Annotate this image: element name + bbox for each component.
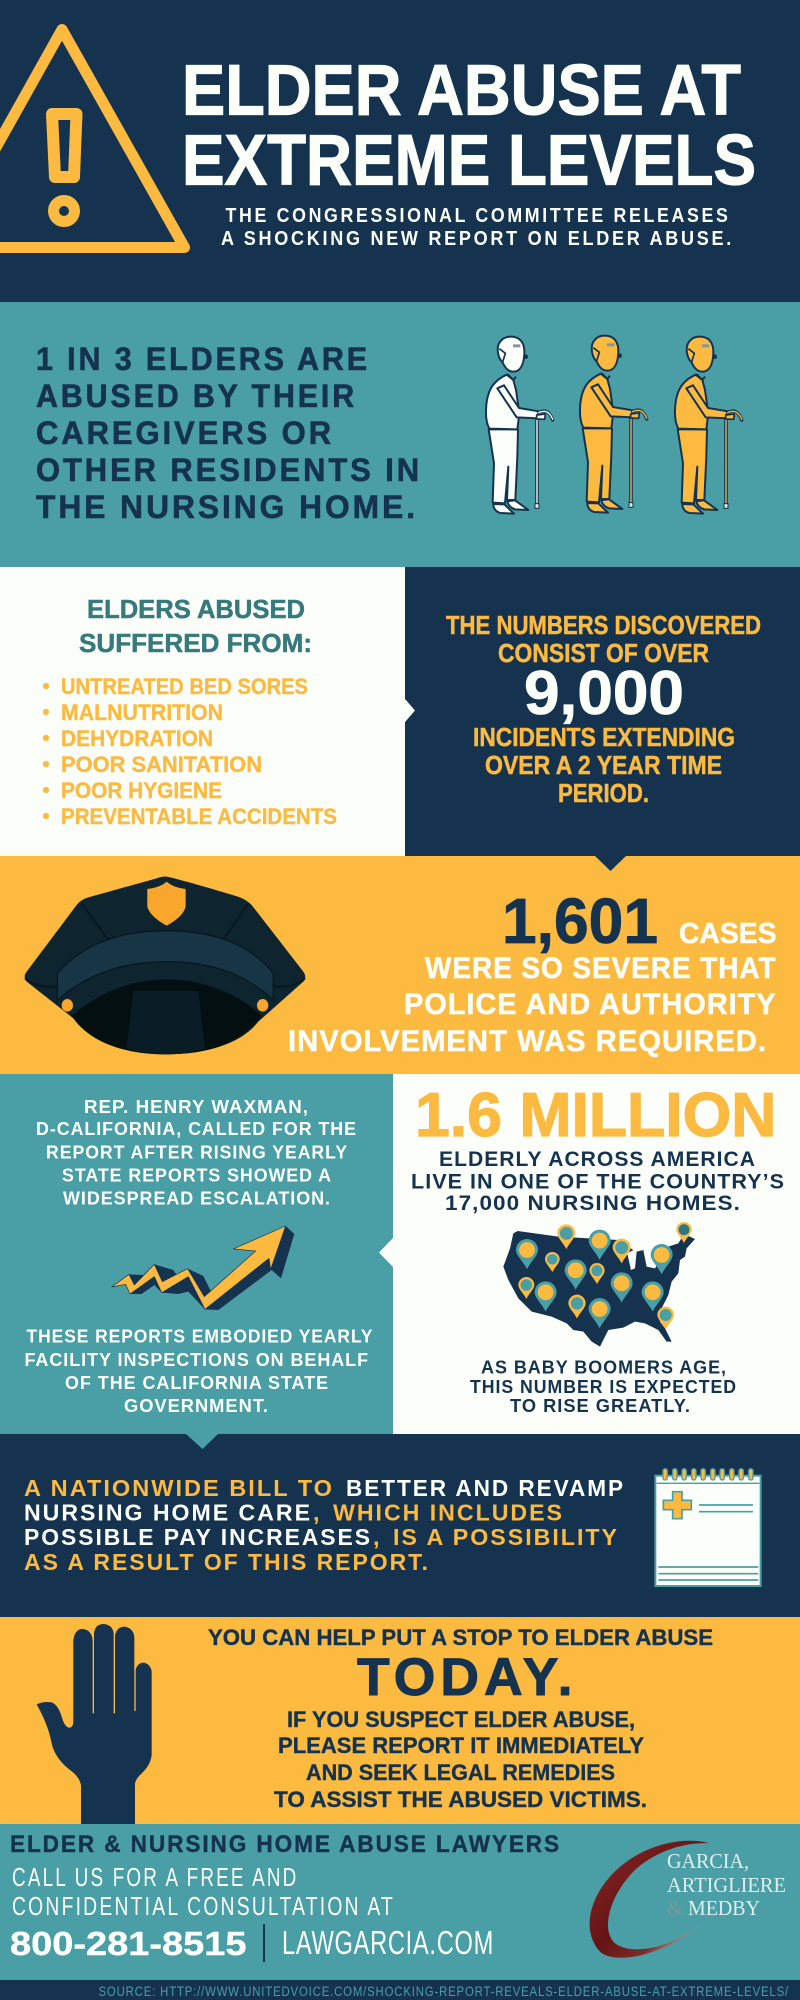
text: report instructions: AND SEEK LEGAL REMEDIES (306, 1760, 615, 1785)
text: Waxman paragraph: REP. HENRY WAXMAN, (84, 1096, 309, 1117)
text: elderly across America (411, 1148, 785, 1215)
stat: 1,601 cases: CASES (679, 918, 776, 950)
text: incidents: PERIOD. (558, 780, 649, 808)
text: baby boomers: TO RISE GREATLY. (510, 1395, 691, 1416)
text: report instructions: TO ASSIST THE ABUSED VICTIMS. (274, 1787, 647, 1812)
text: inspections paragraph: FACILITY INSPECTIONS ON BEHALF (24, 1349, 369, 1370)
text: numbers discovered intro: CONSIST OF OVER (498, 640, 709, 668)
text: call us: CALL US FOR A FREE AND (12, 1862, 298, 1892)
subtitle: THE CONGRESSIONAL COMMITTEE RELEASES (226, 205, 730, 227)
text: police involvement: INVOLVEMENT WAS REQUIRED. (288, 1025, 767, 1058)
logo: Garcia, Artigliere & Medby: & (667, 1896, 683, 1920)
logo: Garcia, Artigliere & Medby (590, 1841, 786, 1958)
text: Waxman paragraph: REPORT AFTER RISING YEARLY (46, 1142, 348, 1162)
arrow: notch pointing left (379, 1238, 393, 1267)
panel: lawyers contact (0, 1824, 800, 1980)
stat: 1,601 cases (502, 885, 776, 957)
text: elderly across America: LIVE IN ONE OF THE COUNTRY’S (411, 1170, 785, 1194)
text: nationwide bill statement: POSSIBLE PAY INCREASES (24, 1524, 372, 1550)
heading: suffered from: SUFFERED FROM: (79, 630, 312, 658)
arrow: notch pointing down (186, 1434, 218, 1449)
panel: source bar (0, 1980, 800, 2000)
icon: warning triangle (0, 30, 184, 248)
icon: raised hand (37, 1624, 152, 1824)
logo: Garcia, Artigliere & Medby: ARTIGLIERE (667, 1873, 786, 1897)
panel: Waxman report (0, 1074, 393, 1434)
panel: header (0, 0, 800, 302)
text: Waxman paragraph: WIDESPREAD ESCALATION. (63, 1188, 331, 1208)
list: conditions: MALNUTRITION (61, 700, 223, 725)
list: conditions: DEHYDRATION (61, 726, 213, 751)
list: conditions: PREVENTABLE ACCIDENTS (61, 804, 337, 829)
text: police involvement (288, 952, 776, 1058)
text: police involvement: WERE SO SEVERE THAT (425, 952, 776, 985)
heading: today: TODAY. (357, 1648, 578, 1707)
text: inspections paragraph: OF THE CALIFORNIA STATE (65, 1372, 329, 1393)
text: Waxman paragraph: STATE REPORTS SHOWED A (62, 1164, 332, 1186)
text: report instructions (274, 1707, 647, 1812)
text: phone number: 800-281-8515 (10, 1925, 246, 1962)
text: inspections paragraph: THESE REPORTS EMBODIED YEARLY (26, 1326, 374, 1346)
text: police involvement: POLICE AND AUTHORITY (404, 988, 776, 1021)
panel: numbers discovered (405, 567, 800, 856)
heading: 1 in 3 elders statement: THE NURSING HOME. (36, 489, 418, 525)
arrow: notch pointing down (595, 856, 626, 871)
icon: medical notepad (655, 1469, 761, 1586)
logo: Garcia, Artigliere & Medby: GARCIA, (667, 1849, 749, 1873)
list: conditions (43, 674, 337, 829)
text: nationwide bill statement: WHICH INCLUDES (333, 1500, 564, 1526)
text: nationwide bill statement: IS A POSSIBILITY (393, 1524, 619, 1550)
panel: 1.6 million (379, 1074, 800, 1434)
panel: call to action (0, 1617, 800, 1824)
stat: 9,000: 9,000 (524, 659, 684, 728)
icon: police hat (25, 877, 305, 1054)
text: incidents: OVER A 2 YEAR TIME (485, 752, 722, 780)
text: report instructions: PLEASE REPORT IT IMMEDIATELY (278, 1733, 644, 1758)
text: baby boomers: AS BABY BOOMERS AGE, (481, 1356, 727, 1378)
text: nationwide bill statement: AS A RESULT OF THIS REPORT. (24, 1549, 430, 1575)
text: nationwide bill statement: NURSING HOME CARE (24, 1500, 312, 1526)
panel: elders abused suffered from (0, 567, 405, 856)
subtitle: A SHOCKING NEW REPORT ON ELDER ABUSE. (221, 228, 734, 250)
text: baby boomers (470, 1356, 737, 1416)
icon: three elderly figures (486, 336, 742, 514)
text: inspections paragraph: GOVERNMENT. (124, 1395, 269, 1416)
subtitle (221, 205, 734, 250)
panel: 1,601 cases (0, 856, 800, 1074)
text: nationwide bill statement (24, 1475, 625, 1575)
icon: rising arrow (112, 1226, 294, 1310)
text: report instructions: IF YOU SUSPECT ELDER ABUSE, (287, 1707, 635, 1732)
text: nationwide bill statement: , (373, 1524, 380, 1550)
text: baby boomers: THIS NUMBER IS EXPECTED (470, 1376, 737, 1397)
list: conditions: UNTREATED BED SORES (61, 674, 308, 699)
text: Waxman paragraph: D-CALIFORNIA, CALLED FOR THE (36, 1118, 357, 1139)
heading: 1 in 3 elders statement: 1 IN 3 ELDERS ARE (36, 341, 370, 377)
text: website: LAWGARCIA.COM (282, 1924, 494, 1961)
text: call us: CONFIDENTIAL CONSULTATION AT (12, 1891, 395, 1921)
text: incidents (473, 724, 735, 808)
arrow: notch pointing right (405, 699, 415, 722)
text: elderly across America: ELDERLY ACROSS AMERICA (439, 1148, 756, 1171)
stat: 1,601 cases: 1,601 (502, 885, 658, 957)
text: incidents: INCIDENTS EXTENDING (473, 724, 735, 752)
text: nationwide bill statement: A NATIONWIDE BILL TO (24, 1475, 334, 1501)
map: United States with location pins (503, 1222, 695, 1347)
heading: lawyers: ELDER & NURSING HOME ABUSE LAWYERS (10, 1831, 561, 1858)
heading: 1 in 3 elders statement: CAREGIVERS OR (36, 415, 334, 451)
heading: suffered from: ELDERS ABUSED (87, 596, 305, 624)
text: numbers discovered intro: THE NUMBERS DISCOVERED (446, 612, 761, 640)
text: nationwide bill statement: , (313, 1500, 320, 1526)
heading: suffered from (79, 596, 312, 658)
title: ELDER ABUSE AT (182, 52, 741, 130)
panel: 1 in 3 elders (0, 302, 800, 567)
text: inspections paragraph (24, 1326, 374, 1416)
list: conditions: POOR HYGIENE (61, 778, 222, 803)
list: conditions: POOR SANITATION (61, 752, 262, 777)
title (182, 52, 756, 200)
text: you can help: YOU CAN HELP PUT A STOP TO ELDER ABUSE (208, 1625, 713, 1650)
text: numbers discovered intro (446, 612, 761, 668)
heading: 1 in 3 elders statement: OTHER RESIDENTS IN (36, 452, 422, 488)
text: nationwide bill statement: BETTER AND REVAMP (346, 1475, 625, 1501)
text: call us (12, 1862, 395, 1921)
heading: 1 in 3 elders statement: ABUSED BY THEIR (36, 378, 357, 414)
stat: 1.6 million: 1.6 MILLION (415, 1081, 776, 1150)
text: Waxman paragraph (36, 1096, 357, 1208)
logo: Garcia, Artigliere & Medby: MEDBY (688, 1896, 760, 1920)
heading: 1 in 3 elders statement (36, 341, 422, 525)
panel: nationwide bill (0, 1434, 800, 1617)
divider between phone and site (263, 1924, 265, 1962)
text: elderly across America: 17,000 NURSING HOMES. (445, 1192, 741, 1215)
